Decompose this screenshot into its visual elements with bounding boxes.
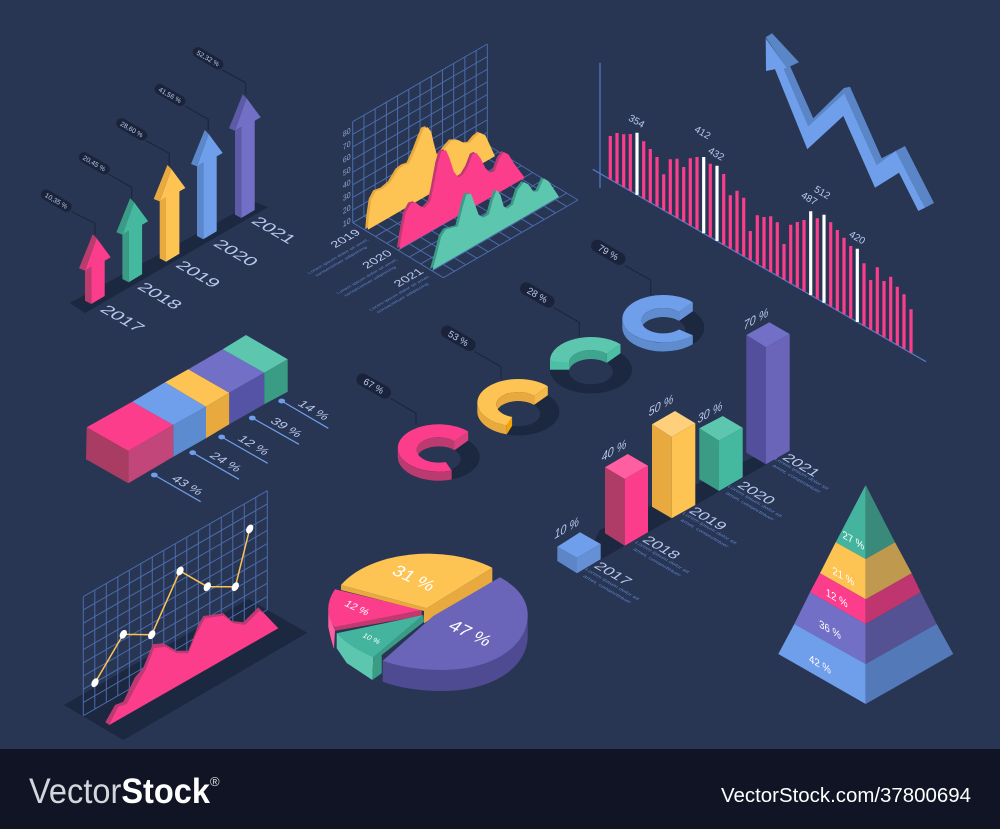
- panel: arrow growth chart: [39, 45, 300, 335]
- area chart year captions: Lorem ipsum dolor sit amet,: [368, 275, 432, 312]
- panel: pyramid chart: [778, 485, 953, 704]
- block percentages: [168, 398, 334, 497]
- donut percentage pills: 53 %: [446, 329, 471, 349]
- value pills: 10,35 %: [43, 192, 68, 211]
- arrow: zigzag trend arrow: [766, 33, 934, 211]
- panel: isometric donut charts: [354, 237, 704, 481]
- block percentages: 24 %: [206, 450, 246, 474]
- year labels: 2020: [209, 237, 262, 269]
- registered mark: ®: [210, 774, 220, 789]
- yellow block: [165, 369, 229, 438]
- panel: line and area chart: [64, 491, 307, 740]
- block leader lines: [151, 399, 328, 502]
- area chart year captions: Lorem ipsum dolor sit amet,: [307, 238, 371, 275]
- green slice: [337, 615, 424, 680]
- axis values: 50: [343, 165, 351, 178]
- pink block: [86, 402, 173, 483]
- pyramid percentages: 21 %: [832, 565, 854, 589]
- yellow slice: [341, 554, 492, 623]
- donut percentage pills: [354, 237, 628, 401]
- area chart year captions: consectetuer adipiscing: [343, 265, 398, 298]
- bar value labels: 412: [692, 124, 713, 142]
- column percentages: [554, 305, 768, 542]
- tier yellow: [820, 542, 912, 599]
- column years: 2017: [590, 560, 635, 588]
- tier blue: [778, 624, 953, 704]
- pie percentages: 12 %: [342, 599, 372, 618]
- panel: descending bar chart: [593, 63, 926, 362]
- pink area 2020: [398, 150, 524, 248]
- area chart year captions: consectetuer adipiscing: [314, 245, 369, 278]
- axis values: 20: [343, 203, 351, 216]
- arrow 2021: [229, 94, 261, 218]
- pie percentages: 31 %: [388, 562, 440, 595]
- pyramid percentages: 27 %: [842, 529, 864, 553]
- panel: 3D column chart: [554, 305, 830, 605]
- panel: stacked 3D block chart: [86, 335, 334, 502]
- pyramid percentages: 36 %: [819, 618, 841, 643]
- value pills: 52,32 %: [195, 50, 220, 68]
- panel: 3D pie chart: [328, 554, 528, 691]
- floor grid: [353, 145, 578, 278]
- bar value labels: 487: [799, 190, 819, 208]
- pyramid percentages: 42 %: [809, 653, 831, 677]
- column years: 2018: [639, 534, 683, 562]
- axis values: 40: [343, 177, 351, 191]
- block percentages: 12 %: [234, 433, 274, 457]
- green block: [223, 335, 288, 404]
- column captions: amet, consectetuer: [724, 492, 775, 522]
- axis values: 30: [343, 190, 351, 203]
- area chart year captions: 2020: [359, 248, 395, 271]
- value pills: 28,60 %: [119, 121, 144, 139]
- column captions: amet, consectetuer: [631, 548, 682, 578]
- pie percentages: 47 %: [445, 617, 496, 650]
- column percentages: 10 %: [554, 514, 579, 542]
- yellow line with points: [90, 523, 255, 688]
- column captions: Lorem ipsum dolor sit: [681, 512, 738, 545]
- blue block: [132, 382, 206, 457]
- axes: [593, 63, 926, 362]
- bar value labels: [626, 113, 867, 247]
- wall grid: [83, 491, 267, 716]
- bar value labels: 354: [626, 113, 647, 131]
- image id: VectorStock.com/37800694: [721, 785, 971, 807]
- column captions: [581, 457, 830, 605]
- yellow area 2019: [366, 127, 494, 229]
- value pills: 20,45 %: [81, 155, 106, 173]
- panel: layered area chart: [307, 44, 578, 314]
- bar value labels: 432: [706, 146, 726, 164]
- value pills: [39, 45, 225, 214]
- column percentages: 40 %: [602, 436, 626, 465]
- column 2019: [652, 411, 695, 518]
- axis values: 10: [343, 216, 351, 229]
- pink bars: [610, 133, 911, 353]
- tier green: [836, 485, 895, 559]
- column captions: amet, consectetuer: [771, 464, 822, 494]
- area chart year captions: 2019: [327, 227, 363, 250]
- donut percentage pills: 79 %: [596, 243, 621, 263]
- column percentages: 30 %: [698, 398, 722, 427]
- axis values: 70: [343, 139, 351, 152]
- column captions: Lorem ipsum dolor sit: [583, 568, 641, 601]
- year labels: [96, 214, 300, 335]
- area chart year captions: consectetuer adipiscing: [375, 282, 430, 314]
- column captions: Lorem ipsum dolor sit: [773, 457, 830, 491]
- logo wordmark: VectorStock: [29, 772, 210, 811]
- column 2020: [699, 416, 743, 491]
- column years: 2019: [685, 505, 730, 533]
- donut pink 67: [398, 424, 480, 481]
- donut blue 79: [622, 295, 704, 351]
- axis values: [343, 126, 351, 229]
- donut green 28: [550, 337, 632, 393]
- block percentages: 14 %: [294, 398, 334, 422]
- column years: 2021: [779, 452, 823, 479]
- pink slice: [328, 589, 422, 649]
- purple slice: [383, 577, 528, 691]
- pie percentages: [342, 562, 496, 650]
- arrow 2017: [79, 234, 111, 304]
- bar value labels: 420: [847, 229, 867, 247]
- year labels: 2017: [96, 302, 149, 335]
- area chart year captions: 2021: [391, 266, 427, 289]
- year labels: 2018: [133, 280, 186, 312]
- footer bar: [0, 749, 1000, 829]
- wall grid: [353, 44, 487, 223]
- white highlighted bars: [637, 133, 857, 322]
- year labels: 2019: [172, 258, 225, 290]
- arrow 2018: [116, 198, 148, 282]
- block percentages: 39 %: [267, 415, 306, 440]
- column captions: Lorem ipsum dolor sit: [633, 541, 691, 574]
- area chart year captions: [307, 227, 432, 314]
- column captions: amet, consectetuer: [679, 519, 730, 549]
- arrow 2019: [154, 165, 185, 262]
- pink area: [105, 607, 278, 725]
- tier pink: [810, 573, 921, 624]
- pyramid percentages: 12 %: [826, 586, 848, 611]
- pyramid percentages: [809, 529, 864, 677]
- year labels: 2021: [247, 214, 300, 246]
- donut yellow 53: [477, 379, 559, 435]
- axis values: 60: [343, 152, 351, 165]
- donut percentage pills: 28 %: [525, 286, 550, 306]
- bar value labels: 512: [812, 184, 832, 202]
- green area 2021: [431, 178, 558, 269]
- callout lines: [391, 266, 651, 425]
- column 2017: [557, 532, 601, 573]
- purple block: [188, 349, 264, 424]
- value pills: 41,56 %: [157, 87, 182, 105]
- pie percentages: 10 %: [360, 631, 383, 646]
- column captions: amet, consectetuer: [581, 575, 632, 605]
- column years: 2020: [734, 479, 778, 507]
- column 2018: [605, 454, 648, 546]
- column captions: Lorem ipsum dolor sit: [726, 485, 783, 518]
- block percentages: 43 %: [168, 473, 207, 497]
- column percentages: 70 %: [744, 305, 768, 333]
- arrow 2020: [191, 130, 223, 239]
- column 2021: [746, 322, 790, 464]
- area chart year captions: Lorem ipsum dolor sit amet,: [336, 258, 400, 295]
- callout lines: [72, 70, 246, 235]
- axis values: 80: [343, 126, 351, 139]
- tier purple: [794, 592, 937, 664]
- column years: [590, 452, 823, 588]
- donut percentage pills: 67 %: [361, 377, 386, 397]
- column percentages: 50 %: [649, 391, 673, 420]
